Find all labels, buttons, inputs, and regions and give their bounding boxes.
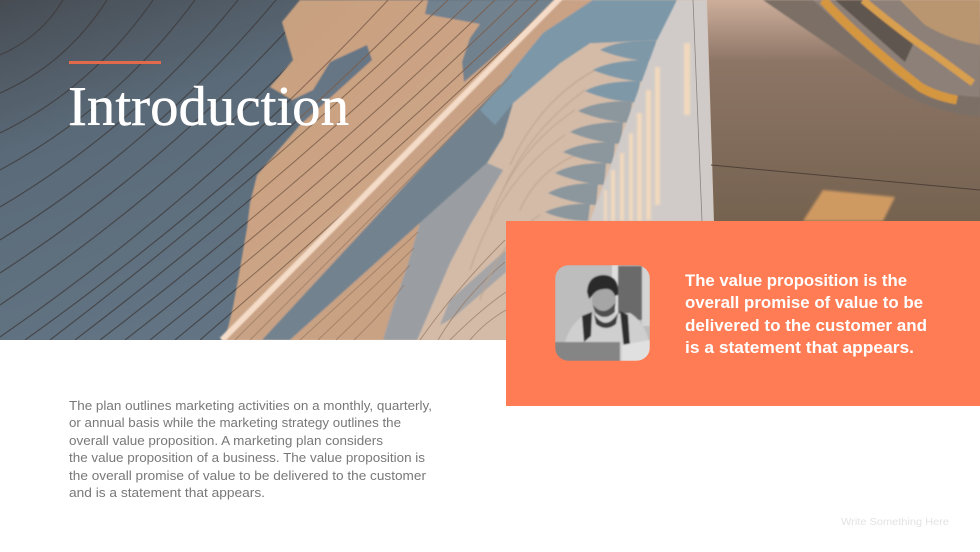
footer note: Write Something Here [841, 516, 949, 528]
lines below the bar [235, 75, 512, 340]
body paragraph [69, 398, 432, 500]
curved panel lines over tan [232, 0, 554, 314]
gray panels [0, 0, 560, 340]
tan panels above bar [222, 0, 677, 340]
top right escalator [763, 0, 980, 117]
accent rule [69, 61, 161, 64]
callout text [685, 272, 927, 357]
curved panel lines over gray [0, 0, 297, 340]
callout text: The value proposition is the [685, 272, 907, 290]
callout text: is a statement that appears. [685, 339, 914, 357]
title: Introduction [68, 76, 349, 138]
body paragraph: overall value proposition. A marketing plan considers [69, 433, 384, 448]
body paragraph: the value proposition of a business. The value proposition is [69, 450, 426, 465]
tan strip below bar [222, 0, 593, 340]
body paragraph: or annual basis while the marketing strategy outlines the [69, 415, 401, 430]
body paragraph: The plan outlines marketing activities on a monthly, quarterly, [69, 398, 432, 413]
body paragraph: the overall promise of value to be delivered to the customer [69, 468, 427, 483]
white column [590, 0, 714, 221]
light bar [222, 0, 562, 340]
portrait photo of man with laptop [555, 265, 650, 361]
brown wall [707, 0, 980, 221]
background photo: architecture [0, 0, 980, 340]
blades [585, 40, 657, 103]
gray band below bar [262, 88, 514, 340]
callout text: delivered to the customer and [685, 317, 927, 335]
body paragraph: and is a statement that appears. [69, 485, 265, 500]
light streaks [604, 43, 690, 221]
pale fan ribs [470, 70, 595, 300]
orange callout panel [506, 221, 980, 406]
amber light patch [803, 190, 895, 221]
light gray band [383, 163, 503, 340]
pale streak [440, 250, 506, 325]
callout text: overall promise of value to be [685, 294, 923, 312]
tan band [290, 223, 420, 340]
